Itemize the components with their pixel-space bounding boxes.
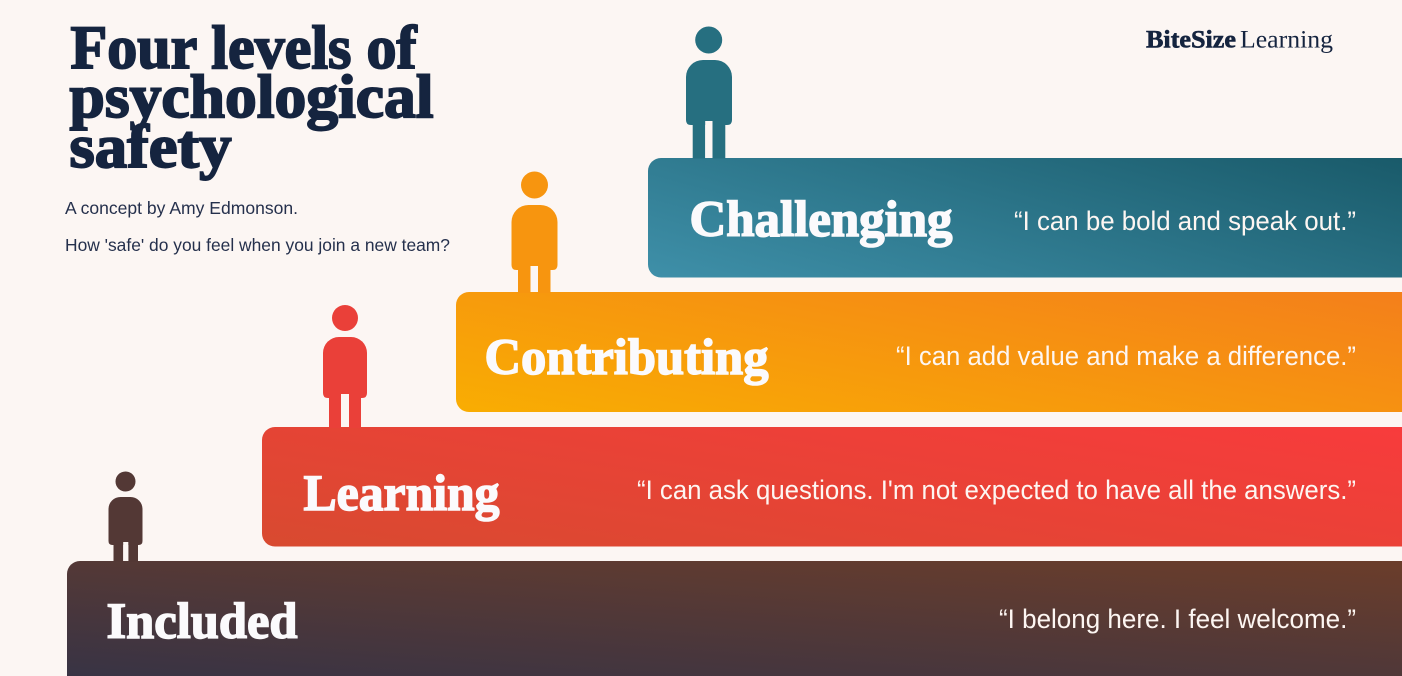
title: psychological bbox=[70, 64, 434, 131]
panel: Learning bbox=[262, 427, 1402, 546]
title: Four levels of bbox=[70, 15, 417, 82]
logo: BiteSize Learning: BiteSize bbox=[1146, 26, 1236, 54]
panel: Contributing bbox=[456, 292, 1402, 412]
title: safety bbox=[70, 114, 232, 181]
intro text: How 'safe' do you feel when you join a new team? bbox=[65, 235, 450, 255]
heading: Challenging: Challenging bbox=[690, 192, 952, 248]
title bbox=[70, 15, 434, 181]
icon: red figure bbox=[323, 305, 367, 428]
intro text bbox=[65, 198, 450, 255]
icon: brown figure bbox=[108, 472, 142, 562]
icon: orange figure bbox=[512, 172, 558, 293]
icon: teal figure bbox=[686, 26, 732, 158]
quote: Included: “I belong here. I feel welcome.” bbox=[999, 604, 1356, 634]
heading: Contributing: Contributing bbox=[484, 330, 768, 386]
panel: Challenging bbox=[648, 158, 1402, 278]
quote: Learning: “I can ask questions. I'm not expected to have all the answers.” bbox=[637, 475, 1356, 505]
intro text: A concept by Amy Edmonson. bbox=[65, 198, 298, 218]
heading: Learning: Learning bbox=[304, 466, 500, 522]
heading: Included: Included bbox=[106, 594, 298, 650]
quote: Contributing: “I can add value and make a difference.” bbox=[896, 341, 1356, 371]
logo: BiteSize Learning bbox=[1146, 26, 1334, 54]
quote: Challenging: “I can be bold and speak out.” bbox=[1014, 206, 1356, 236]
panel: Included bbox=[67, 561, 1402, 676]
logo: BiteSize Learning: Learning bbox=[1240, 26, 1334, 54]
